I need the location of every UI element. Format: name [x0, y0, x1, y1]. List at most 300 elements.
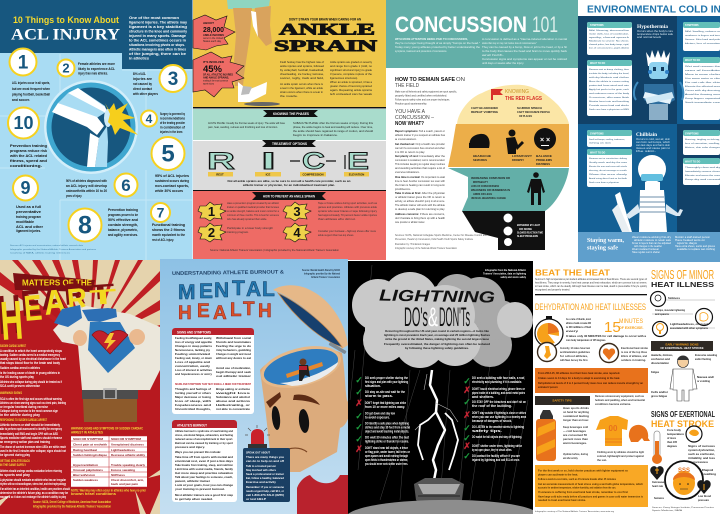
fact labels: not caused by	[133, 82, 152, 86]
hypothermia cards: Cover with dry dressing	[685, 89, 720, 92]
phases text: ACUTE PHASE: Usually the first two weeks of injury. The ankle will have	[208, 121, 285, 125]
footnotes: Courtesy of NATA, athletic training references	[10, 252, 70, 254]
panel: ACL injury: 7	[157, 204, 165, 220]
intro text: ligament is a key stabilizing	[129, 25, 187, 29]
do's and don'ts right: ✗	[463, 410, 471, 420]
panel: beat the heat	[533, 262, 720, 514]
athlete's burnout card: Take breaks from training, sleep, and nutrition	[175, 463, 233, 467]
prevention text: on ankle strength, balance and motor control for a	[227, 209, 279, 213]
safety text: sustained lasting	[563, 414, 589, 418]
heart left text: If an athlete has an inherited condition, health care providers should	[0, 487, 70, 491]
athlete's burnout card: to get help when needed.	[175, 497, 213, 501]
fact labels: injuries in the knee.	[160, 130, 183, 134]
yellow tips box	[535, 465, 648, 507]
orange box: From 2013-15, 36 athletes lost their lives heat stroke, was reported.	[538, 371, 620, 375]
hypothermia cards: Monitor heart rate and breathing	[589, 100, 630, 103]
icons: jersey and helmet: 00	[609, 424, 618, 433]
do's and don'ts right: ✓	[463, 451, 471, 461]
lightning intro: Frequently overestimated, the danger of lightning can often be reduced	[384, 342, 490, 346]
heart left text: Sudden cardiac arrest in athletes	[0, 366, 40, 370]
phases text: pain, heat, swelling, redness and throbbing and loss of function.	[208, 125, 278, 129]
neurological symptoms: LOSS OF CONSCIOUSNESS	[471, 184, 499, 188]
yellow tips box: accounts for ambient temperature, relative humidity, and radiation from the sun.	[538, 486, 616, 490]
do's and don'ts right: the roof of the building.	[472, 404, 512, 408]
red flag symptoms: PROBLEMS	[536, 158, 552, 162]
ankle sprain facts: greater chance of becoming sprained	[330, 84, 372, 88]
staying warm: staying safe	[587, 246, 618, 252]
signs and symptoms card: without any desire to eat	[215, 356, 251, 360]
do's and don'ts left: DO get down and stay low	[365, 412, 395, 416]
athlete's burnout card: reduced sense of accomplishment in their sport.	[175, 437, 233, 441]
callout: 45%	[193, 52, 244, 97]
nervous system text	[688, 444, 716, 464]
concussion intro: They can be caused by a bump, blow or jolt to the head, or by a hit	[482, 45, 567, 49]
icons: New Jersey and heart	[538, 342, 618, 362]
icon: thermometer	[652, 431, 662, 464]
heart title: T	[89, 285, 118, 310]
hypothermia cards: Seek immediate care	[685, 101, 720, 104]
superhero figure	[53, 305, 160, 422]
fact labels: preventative	[16, 210, 41, 214]
staying warm: Take regular rest in shelter	[632, 251, 660, 254]
head diagram: × ×	[540, 137, 550, 144]
signs and symptoms card: abuse and actions	[216, 399, 251, 403]
head illustration	[257, 285, 349, 514]
prevention text: had approximately 70 percent fewer ankle injuries	[318, 213, 377, 217]
signs table: Chest pain at rest/with	[73, 442, 107, 446]
prevention text: trainer or qualified medical provider that focuses	[227, 205, 279, 209]
concussion steps: Get checked out: Only a health care provider	[395, 142, 445, 146]
heart title: MATTERS OF THE	[22, 278, 93, 288]
do's and don'ts left: DO identify a safe place when lightning	[365, 422, 409, 426]
fact labels: Functional training	[152, 223, 185, 227]
heading: how to prevent	[252, 192, 326, 200]
lightning title: LIGHTNING	[379, 288, 495, 307]
fact labels: 80% of ACL	[133, 72, 146, 76]
hypothermia cards: motor skills, loss of coordination,	[589, 32, 629, 36]
call to action box: Stay involved with others	[246, 468, 276, 472]
chilblain cards: Warm the area slowly	[589, 173, 629, 176]
concussion steps: and avoiding activities that require a lot of	[395, 166, 445, 170]
fact labels: but are most frequent when	[12, 87, 50, 91]
body diagram: Cells and/or	[651, 390, 669, 394]
hypothermia cards: Provide warm food and drinks	[589, 104, 630, 107]
chilblain cards: Elevate the area and cover with sterile	[589, 165, 628, 168]
call to action box: There are many things you	[246, 455, 284, 459]
heading: you have a concussion: CONCUSSION –	[395, 115, 434, 121]
prevention text: who has already sprained their ankle.	[227, 217, 267, 221]
lightning title: &	[428, 302, 438, 332]
minor heat illness items: Lightheadedness, often not	[670, 322, 708, 326]
leg illustration	[227, 0, 280, 106]
safety text: Have sports drinks	[563, 406, 589, 410]
concussion credits: Illustration by: Thinkstock Images	[395, 243, 431, 246]
ankle sprain facts: 3 (severe, complete rupture of the	[330, 72, 372, 76]
signs table: SIGN OR SYMPTOM	[111, 437, 142, 441]
safety list	[395, 90, 457, 106]
signs and symptoms card: Withdrawal from social	[216, 336, 251, 340]
callout: 45%: AND ANKLE SPRAINS,	[203, 76, 229, 80]
do's and don'ts right: ✗	[463, 385, 471, 395]
fact labels: Prevention training	[10, 144, 47, 148]
signs and symptoms card: Changes in weight and mood	[216, 352, 251, 356]
minor heat illness items: associated with other symptoms	[670, 326, 708, 330]
signs table: Decrease athletic ability	[111, 453, 145, 457]
callout: 45%: IT'S INVOLVED	[203, 60, 225, 64]
hypothermia cards: with dry blankets and clothes	[589, 76, 630, 79]
intro text: structure in the knee and commonly	[129, 30, 187, 34]
callout: 28,000: ANKLE INJURIES	[203, 34, 224, 37]
fact labels: in combination of	[160, 126, 186, 130]
signs and symptoms card: Thoughts and feelings of	[175, 387, 211, 391]
concussion credits	[395, 234, 488, 250]
do's and don'ts right: when you can use lightning in a nearby area	[471, 415, 526, 419]
call to action box: needs urgent help, call 911, or	[246, 489, 285, 493]
signs and symptoms card: SIGNS AND SYMPTOMS THAT MAY SIGNAL A NEED FOR TREATMENT	[175, 383, 252, 386]
RICE letters: E	[347, 148, 369, 175]
footnotes	[10, 244, 96, 254]
fact labels: Female athletes are more	[78, 62, 115, 66]
chilblain cards: Seek care from a physician	[589, 181, 620, 184]
fact labels: ligament injuries.	[16, 229, 41, 233]
heat stroke sources: Sports Medicine, NATA	[652, 509, 683, 512]
fact labels: contain strength,	[108, 223, 138, 227]
do's and don'ts left: DON'T forget that lightning can strike	[365, 401, 406, 405]
dehydration fact: athletes should consume 200	[566, 321, 591, 325]
heart footer: Source: NATA, Drexel College of Medicine, American Heart Association	[33, 500, 111, 504]
do's and don'ts right: ✓	[463, 376, 471, 386]
lightning title: DON'Ts	[439, 302, 470, 332]
call to action box: Remember: if you or someone	[246, 485, 284, 489]
hypothermia cards: SYMPTOMS	[590, 24, 604, 27]
RICE labels: COMPRESSION	[303, 172, 323, 176]
heart icons and labels: heart rate	[652, 484, 663, 488]
signs of minor heat illness heading	[651, 267, 714, 289]
RICE labels: ICE	[266, 172, 270, 176]
signs and symptoms card: weight loss	[214, 391, 251, 395]
panel: ACL injury: 8	[78, 212, 92, 240]
signs table: Hyperventilation	[73, 463, 98, 467]
do's and don'ts left: ✗	[355, 398, 363, 408]
heat stats: killers of athletes, and	[621, 354, 647, 358]
concussion title: 101	[532, 12, 558, 37]
mental health title: T	[243, 299, 255, 320]
panel: ACL injury: 10	[13, 113, 34, 133]
fact labels: Used as a full	[16, 205, 41, 209]
top credit: safety and storm safety	[500, 276, 527, 279]
do's and don'ts left: from 10 or more miles away.	[365, 405, 405, 409]
ankle sprain facts: ligamentous structures).	[330, 76, 358, 80]
do's and don'ts left: open spaces and avoid running through	[365, 454, 408, 458]
chilblain text: can last days and harm skin	[636, 144, 671, 147]
do's and don'ts right: because of dangers of shock.	[472, 419, 512, 423]
dehydration heading: DEHYDRATION AND HEAT ILLNESSES	[535, 302, 646, 313]
red flag symptoms: DIZZINESS	[536, 162, 550, 166]
do's and don'ts right: ✗	[463, 441, 471, 451]
do's and don'ts left	[355, 375, 411, 466]
mental health title: UNDERSTANDING ATHLETE BURNOUT &	[172, 269, 284, 277]
hypothermia cards: Use warm water or skin	[685, 77, 720, 80]
heading: you have a concussion	[395, 109, 434, 127]
nervous system text: such as confusion,	[688, 452, 715, 456]
minor heat illness items	[650, 292, 715, 336]
icon: water bottle	[536, 410, 556, 461]
concussion steps: Report symptoms: Tell a coach, parent or	[395, 129, 445, 133]
yellow tips box: For the first week or so, hold shorter practices with lighter equipment so	[538, 468, 628, 472]
signs and symptoms card: concentration, easily	[175, 364, 211, 368]
RICE labels: ELEVATION	[349, 172, 364, 176]
hypothermia cards: apathy, slurred speech	[589, 36, 630, 39]
other symptoms	[517, 223, 543, 238]
signs table: ARREST IN ATHLETES	[71, 430, 104, 434]
top credit	[483, 269, 527, 279]
signs table: back and jaw pain	[111, 482, 138, 486]
do's and don'ts left: strikes and stay 30 feet from a metal	[365, 426, 410, 430]
hypothermia cards: Apply hot packs to the groin, neck	[589, 88, 630, 91]
concussion steps: athletic trainer if you suspect an athlete has	[395, 133, 445, 137]
do's and don'ts right: DO STAY OFF the bleachers and don't sit on	[472, 400, 526, 404]
do's and don'ts left: DO stay on-site and wait for the	[365, 390, 405, 394]
signs table: Sudden fainting/collapse	[73, 453, 107, 457]
RICE note: Not all ankle sprains are alike, so be sure to consult a health care provider, such as an	[228, 179, 351, 183]
safety text: Remove unnecessary equipment, such as	[595, 394, 644, 398]
dividers	[0, 54, 192, 260]
heart title: R	[66, 282, 89, 317]
hypothermia cards: and underarm areas of the body	[589, 92, 630, 95]
fact labels: conditioning.	[10, 164, 42, 168]
fact labels: rest of ACL injury.	[152, 238, 174, 242]
staying warm: available to replace wet clothing	[677, 248, 716, 251]
prevention badges: 2	[208, 225, 215, 240]
safety text: Keep beverages cold	[563, 425, 588, 429]
beat the heat intro: heat illness. They range in severity, from heat cramps and heat exhaustion, which are common but not severe,	[535, 282, 647, 284]
do's and don'ts right: ✓	[463, 423, 471, 433]
phases text	[208, 121, 373, 137]
do's and don'ts left: ✗	[355, 444, 363, 454]
heart left text: the US during sports play	[0, 375, 34, 379]
staying warm: sports days	[677, 242, 698, 245]
safety text: Clothing worn by athletes should be light	[597, 450, 644, 454]
staying warm: with changes in the weather	[634, 245, 662, 248]
signs and symptoms card: begin therapy and seek	[216, 370, 251, 374]
signs table: Lightheadedness	[111, 448, 135, 452]
rain streaks	[350, 265, 528, 500]
signs and symptoms card: Binge eating or extreme	[216, 387, 250, 391]
concussion steps: care provider or athletic trainer.	[395, 220, 425, 224]
safety text: and after activity.	[563, 456, 578, 460]
heart icons and labels	[650, 466, 716, 502]
signs table: known heart conditions	[71, 492, 116, 496]
RICE labels	[208, 172, 369, 176]
heart left text: usually caused by an electrical disturbance in the heart	[0, 357, 67, 361]
staying warm	[587, 236, 716, 254]
signs and symptoms card: Substance and alcohol	[216, 395, 250, 399]
callout: 45%: sports injury	[203, 82, 214, 86]
early warning heading: EARLY WARNING SIGNS	[666, 342, 699, 346]
minor heat illness items: Sickness	[668, 296, 680, 300]
signs table: NOTE: Warning may often occur in athletes who have no prior	[71, 488, 147, 492]
fact labels: and soccer.	[12, 98, 30, 102]
fact labels: shows the 2 fitness	[152, 228, 185, 232]
head diagram	[448, 85, 569, 250]
concussion steps: or athletic trainer gives the OK to return to	[395, 195, 445, 199]
heat stats: Exertional heat stroke	[621, 346, 648, 350]
ankle sprain title: SPRAIN	[274, 38, 378, 55]
prevention text: Have a prevention program created by an athletic	[227, 201, 279, 205]
signs of minor heat illness heading: HEAT ILLNESS	[651, 280, 714, 289]
orange box: estimated 2 percent.	[538, 385, 558, 389]
fact labels: balance, plyometric,	[108, 228, 138, 232]
orange box: Dehydration at levels of 3 to 4 percent body mass loss can reduce muscle strength by an	[538, 381, 643, 385]
ankle sprain title: DON'T STRAIN YOUR BRAIN WHEN CARING FOR AN	[289, 18, 361, 22]
neurological symptoms: IRRITABILITY	[473, 180, 488, 184]
signs and symptoms card: loss of energy and appetite	[175, 340, 212, 344]
signs and symptoms card: friends and teammates	[216, 340, 252, 344]
intro text: Athletic managers also often in times	[129, 48, 186, 52]
heart left text: rhythm with an echocardiogram, stress test, and electrophysiology	[0, 482, 66, 486]
intro text: of the jumping, there can be	[129, 52, 186, 56]
dehydration fact: As a rule of thumb, most	[566, 317, 591, 321]
hypothermia cards: WHAT TO DO	[590, 62, 605, 65]
heat stroke heading	[651, 410, 715, 430]
call to action box	[243, 448, 290, 502]
concussion intro: until days or weeks after the injury.	[482, 61, 524, 65]
ankle sprain facts: strain occurs when there is a tear in	[280, 90, 323, 94]
concussion intro: A concussion is defined as a "trauma-induced alteration in mental	[482, 37, 567, 41]
lightning intro	[384, 329, 490, 350]
chilblain text: the skin.	[636, 150, 657, 153]
signs and symptoms card: Uncontrolled thoughts,	[175, 407, 211, 411]
prevention badges: 3	[293, 204, 301, 219]
fact labels: ACL and other	[16, 225, 44, 229]
heading: treatment options: TREATMENT OPTIONS	[272, 142, 307, 146]
do's and don'ts left: ✓	[355, 387, 363, 397]
mental health title: N	[214, 279, 229, 302]
fact labels: of the treating provider	[160, 121, 186, 125]
heart left text: to sports and play	[0, 473, 30, 477]
header band	[0, 0, 192, 69]
concussion steps: can tell if a concussion has occurred and when	[395, 146, 445, 150]
fact labels: likely to experience ACL	[78, 67, 115, 71]
concussion intro: status that may or may not involve loss of consciousness."	[482, 41, 537, 45]
heart title: E	[22, 287, 44, 329]
hypothermia cards: If conscious, offer warm fluids	[589, 96, 630, 99]
concussion steps: activity, an athlete shouldn't jump in all at once.	[395, 199, 445, 203]
safety list: Practice good sportsmanship.	[395, 102, 427, 106]
panel: ACL injury: 3	[168, 69, 178, 90]
prevention text: Participate in a lower body strength	[227, 226, 273, 230]
hypothermia text	[637, 25, 674, 39]
icon: alarm siren	[245, 425, 270, 448]
safety text: colored, lightweight and protect against	[597, 454, 644, 458]
heat stroke sources: Sources: Korey Stringer Institute, Preseason Practice	[652, 506, 715, 509]
top credit: Infographic from the National Athletic	[485, 269, 527, 272]
red flag symptoms: REPEAT VOMITING	[471, 110, 499, 114]
body diagram	[651, 353, 717, 401]
do's and don'ts right: ✓	[463, 397, 471, 407]
prevention text	[227, 201, 377, 237]
heart icons and labels: pressure	[698, 498, 709, 502]
panel: ACL injury: 9	[20, 178, 31, 198]
heart title: E	[19, 281, 43, 324]
do's and don'ts left: lightning strike or thunder to resume.	[365, 440, 409, 444]
heart left text	[0, 344, 70, 499]
staying warm: athletic moisture to retain safe	[634, 239, 672, 242]
author credit: Source: Mental Health Stand by NATA	[302, 268, 340, 272]
prevention text: Tape or brace ankles during sport activities, such as	[318, 201, 377, 205]
prevention badges	[198, 202, 311, 242]
heart left text: Immediately call EMS and begin CPR with an AED	[0, 432, 59, 436]
fact labels: and agility exercises.	[108, 233, 138, 237]
do's and don'ts left: DO wait 30 minutes after the last	[365, 436, 410, 440]
core body text: degrees	[667, 444, 677, 448]
do's and don'ts left: or flag pole, water tower, tall trees or	[365, 450, 411, 454]
hypothermia cards: WHAT TO DO	[685, 59, 700, 62]
face circle	[665, 461, 703, 499]
nervous system text: system dysfunction,	[688, 448, 715, 452]
neurological symptoms: UNUSUAL BEHAVIORAL CHANGE	[471, 196, 506, 200]
body diagram: Nausea and/	[697, 375, 714, 379]
hypothermia cards: Moderate to severe: No shiver,	[589, 40, 630, 42]
heart left text: or irregular heartbeat during exercise	[0, 405, 48, 409]
hypothermia cards: Avoid the thawing area	[685, 93, 720, 96]
prevention text: sprains who wear braces or tape following injury	[318, 209, 377, 213]
callout: 28,000: ABOUT	[203, 21, 214, 25]
callout: 28,000: 28,000	[203, 25, 224, 34]
safety list: Follow sports safety rules and use proper techniques.	[395, 98, 450, 102]
signs and symptoms card: SIGNS AND SYMPTOMS	[177, 330, 211, 334]
number badges	[8, 48, 186, 242]
footnotes: Sources: ACL injuries and reconstruction, national athletic research data	[10, 244, 83, 247]
fact labels: programs reduce risk	[10, 149, 47, 153]
heart left text: in the athlete during play	[0, 413, 40, 417]
panel: ACL injury: 6	[121, 176, 131, 195]
callout: 28,000: States each day	[203, 40, 222, 43]
heart left text: Athletic trainers or staff should be immediately	[0, 423, 60, 427]
chilblain text: Chilblain	[636, 133, 657, 138]
do's and don'ts left: open fields in thunderstorms or storms;	[365, 458, 408, 462]
athlete's burnout card: stress, emotional fatigue, exhaustion, and feeling	[175, 433, 233, 437]
beat the heat intro: Summer's high temperatures put student athletes at increased risk of heat illness. There are several types of	[535, 278, 647, 281]
heart left text: Collapse during exercise is the most common sign	[0, 409, 58, 413]
do's and don'ts right: injured by lightning and call 911 at once.	[472, 458, 520, 462]
heart icons and labels: Increased	[652, 480, 666, 484]
hypothermia text: temperature drops below safe	[637, 33, 674, 36]
heart left text: able to perform rapid assessment to identify the emergency	[0, 427, 62, 431]
chilblain cards: itching on skin	[589, 142, 612, 144]
concussion credits: Sources: NATA, National Collegiate Sports Medicine, Center for Disease Control and	[395, 234, 488, 237]
do's and don'ts right: DO LISTEN to the weather alerts to lightning	[472, 425, 524, 429]
fact labels: Surgery is governed by	[160, 112, 185, 116]
do's and don'ts right: safety tips.	[472, 429, 502, 433]
signs table: Racing heartbeat	[73, 448, 97, 452]
do's and don'ts left: DO seek proper shelter during the	[365, 376, 408, 380]
concussion title: CONCUSSION	[395, 12, 527, 37]
phases text: the ankle should have regained its range of motion, and should	[293, 129, 373, 133]
top credit: Trainers' Association, data on lightning	[483, 272, 527, 276]
other symptoms: SLEEP PROBLEMS	[517, 234, 538, 238]
red flag symptoms: LOSS/FUZZY	[512, 154, 532, 158]
red flag symptoms: HEADACHE	[473, 154, 491, 158]
panel: ACL injury: 1	[18, 52, 29, 74]
safety text: helmets and padding, when environmental	[595, 398, 645, 402]
heat stats: soldiers in training.	[621, 358, 646, 362]
yellow tips box: Follow a work-to-rest ratio, such as 15-minute breaks after 45 minutes	[538, 477, 616, 481]
fact labels: non-contact sports,	[155, 184, 189, 188]
signs table: Excess sweating	[111, 468, 135, 472]
back cloud	[434, 274, 520, 367]
hypothermia text: Hypothermia	[637, 25, 669, 30]
